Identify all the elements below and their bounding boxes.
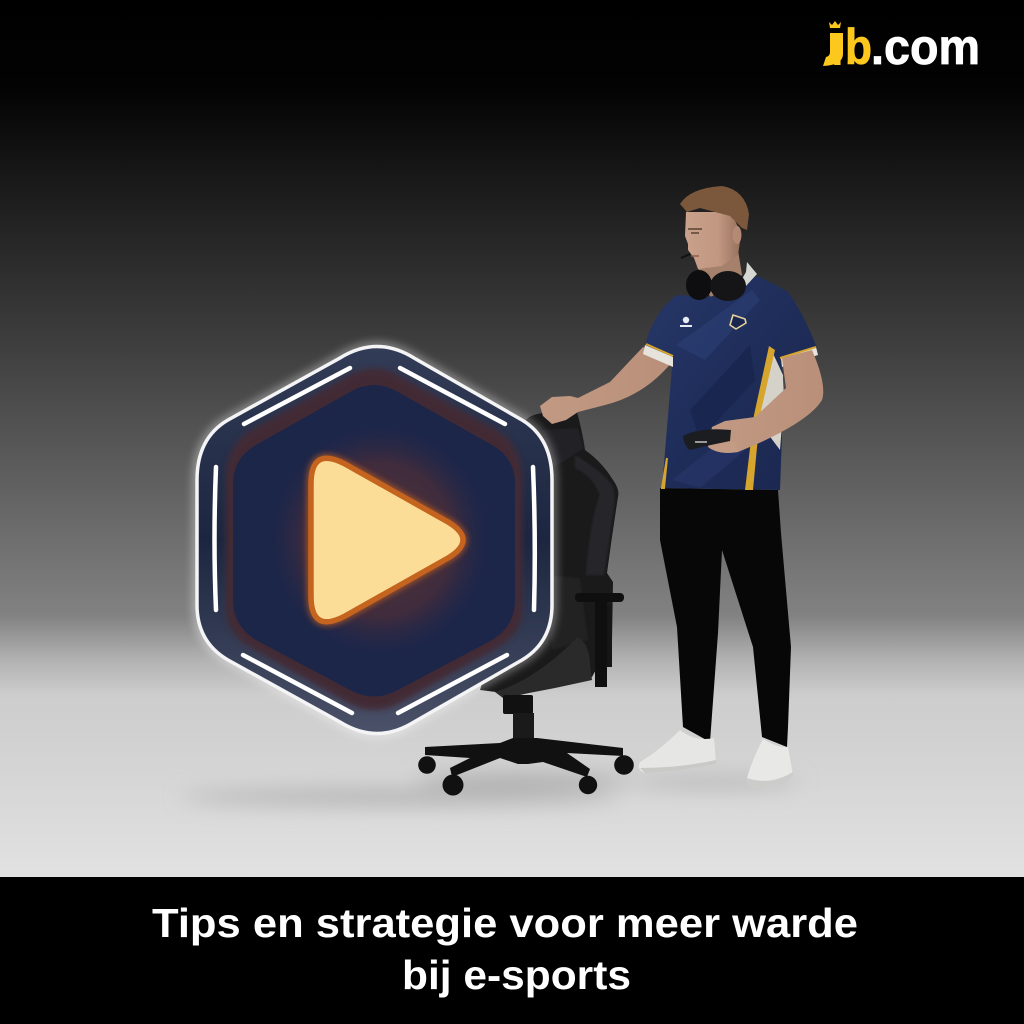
jersey side panel [756,347,784,450]
logo crown [829,21,841,28]
jersey [643,276,818,490]
badge outer glow [197,346,552,734]
badge maroon band [226,368,522,710]
game controller [683,429,731,450]
logo [823,21,978,66]
left arm [540,347,672,424]
floor shadow [180,773,800,805]
jersey crest [730,315,746,329]
chair armrest [575,593,624,687]
right shoe [747,739,793,788]
jersey small logo [680,317,692,327]
title line 2: bij e-sports [402,952,631,998]
logo j [823,33,843,66]
chair backrest [480,412,618,695]
brow and eye [688,229,702,233]
hair [680,186,749,230]
ear [732,226,742,244]
badge frame [197,346,552,734]
gaming chair [418,412,634,796]
jersey gold stripe [745,346,775,490]
right arm [708,350,823,453]
logo com: .com [871,19,980,75]
badge navy panel [233,385,515,696]
chair star base [418,738,634,796]
title [152,900,858,998]
chair column [503,695,534,743]
mouth [691,255,699,257]
fingers over controller [709,441,738,453]
bottom banner [0,877,1024,1024]
play badge [197,346,552,734]
title line 1: Tips en strategie voor meer warde [152,900,858,946]
chair seat [495,637,592,698]
player [540,186,823,788]
triangle halo [311,458,463,622]
play triangle [311,458,463,622]
left shoe [639,730,716,773]
neck [698,250,742,298]
logo b: b [845,19,872,75]
badge light segments [214,368,535,713]
triangle glow [268,422,492,658]
sleeve trim left [643,344,673,367]
sleeve trim right [780,347,818,367]
logo j: j [830,22,844,74]
collar [738,262,757,287]
trousers [660,488,791,747]
headset [681,254,746,301]
face [685,212,742,269]
